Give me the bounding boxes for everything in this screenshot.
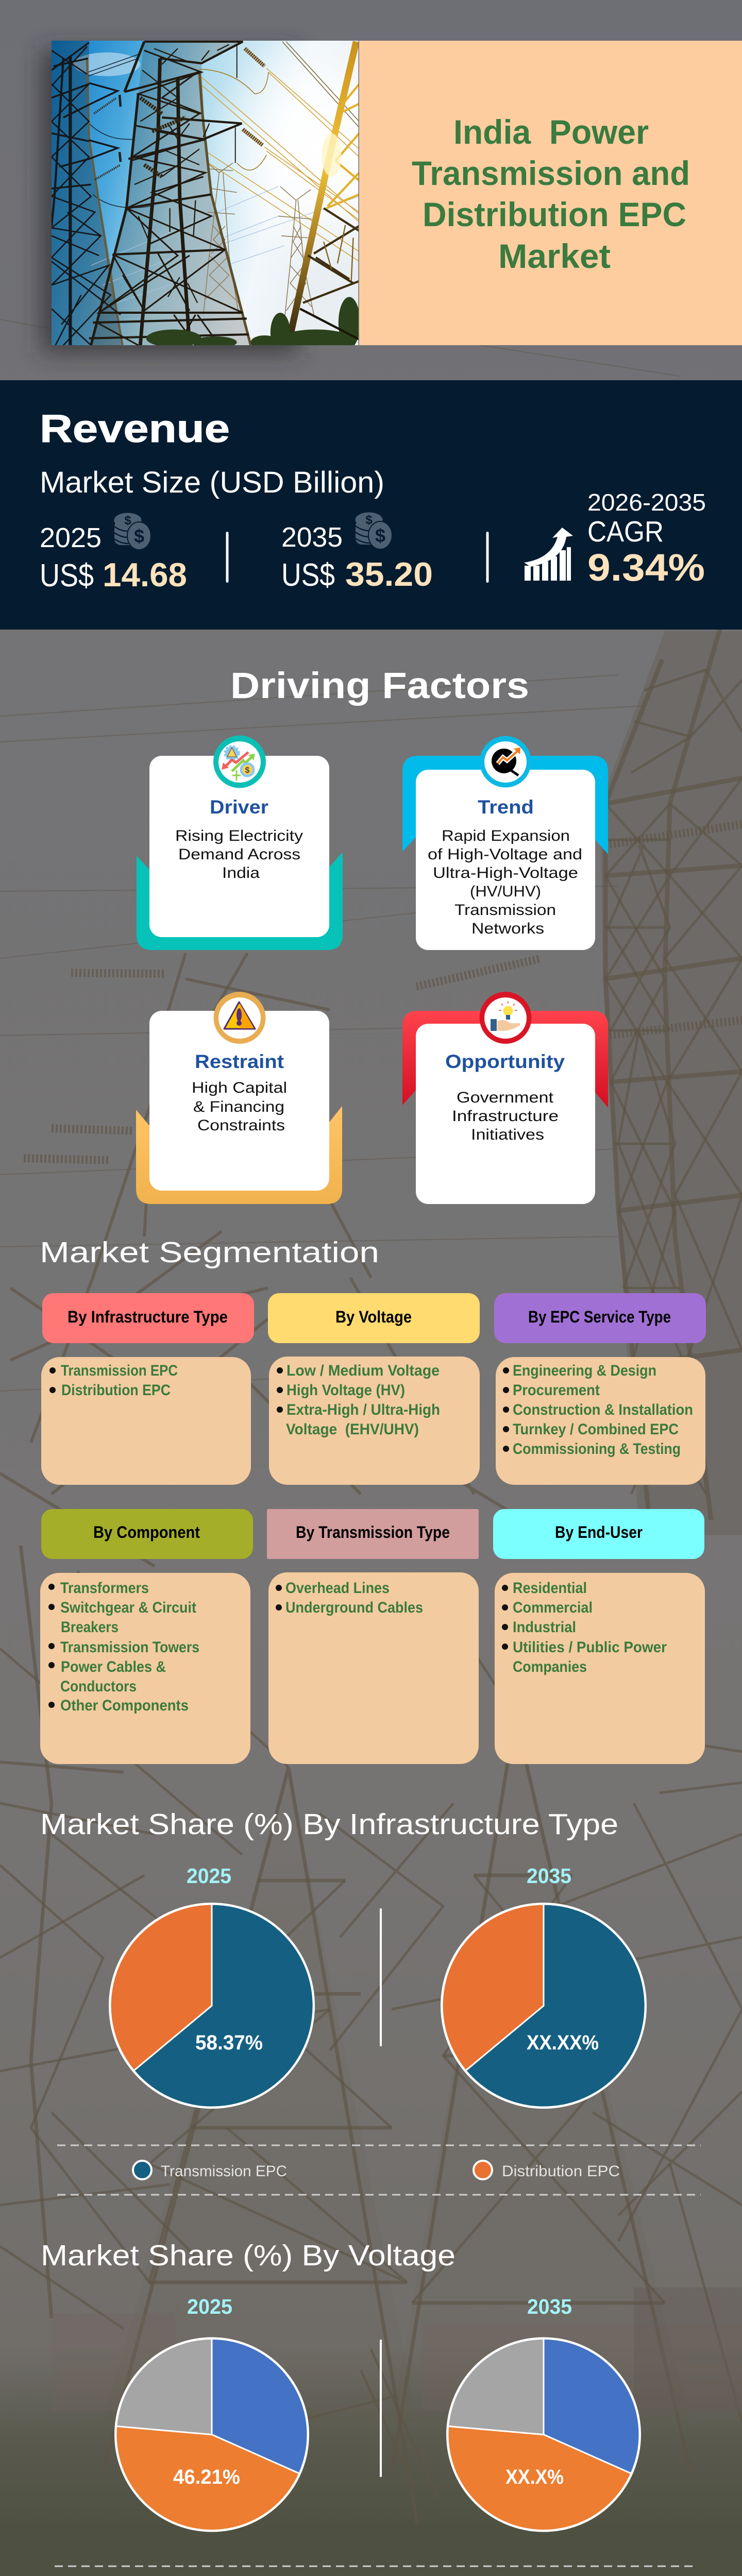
panel: by component [40, 1509, 253, 1764]
background: distant buildings and grass [52, 2287, 742, 2411]
2025 value: US$ [40, 558, 94, 594]
opportunity text: Initiatives [471, 1126, 544, 1143]
icon: driver: $ [245, 766, 250, 775]
driver text: India [222, 865, 260, 882]
list items [277, 1362, 440, 1438]
driver card [149, 756, 329, 937]
list items: Commissioning & Testing [513, 1440, 681, 1458]
header [268, 1293, 480, 1343]
opportunity text [452, 1089, 559, 1143]
header text: By Component [93, 1523, 200, 1541]
list items: Breakers [61, 1619, 119, 1636]
revenue background [0, 380, 742, 630]
pie 2035 [447, 2338, 640, 2531]
list items: Other Components [60, 1697, 189, 1714]
icon: coin stack 2025: $ [124, 514, 131, 528]
header text: By End-User [555, 1523, 643, 1541]
panel: by end-user [493, 1509, 705, 1764]
title: Distribution EPC [423, 195, 686, 233]
list items: Companies [513, 1658, 587, 1675]
list items: Switchgear & Circuit [60, 1599, 196, 1616]
trend text: Transmission [454, 902, 556, 919]
driver text [175, 827, 303, 882]
opportunity text: Government [457, 1089, 554, 1106]
trend text: of High-Voltage and [428, 846, 582, 863]
market size label: Market Size (USD Billion) [40, 466, 384, 499]
panel: driver [137, 736, 343, 950]
restraint card [149, 1011, 329, 1191]
list items [503, 1362, 693, 1458]
CAGR [587, 489, 706, 589]
list items: Engineering & Design [513, 1362, 656, 1379]
hero shadow [41, 49, 299, 353]
trend text: (HV/UHV) [470, 883, 541, 900]
panel: by EPC service type [494, 1293, 706, 1485]
hero panel [41, 41, 742, 353]
2035 value [281, 522, 433, 593]
panel: by voltage [268, 1293, 480, 1485]
CAGR: 9.34% [587, 546, 705, 589]
list body [269, 1357, 480, 1485]
label 2035: 2035 [527, 2295, 572, 2318]
tree line [146, 297, 359, 345]
header [267, 1509, 479, 1559]
list items: Overhead Lines [285, 1580, 390, 1597]
revenue panel [0, 380, 742, 630]
legend item: distribution EPC: Distribution EPC [502, 2163, 620, 2180]
header text: By EPC Service Type [528, 1308, 671, 1326]
restraint ribbon [136, 1106, 342, 1204]
2025 value: 2025 [40, 522, 102, 553]
panel: restraint [136, 992, 342, 1204]
title [412, 113, 690, 275]
heading: driving factors: Driving Factors [230, 666, 529, 706]
driver text: Demand Across [178, 846, 300, 863]
2025 value [40, 522, 187, 594]
heading: market share by voltage: Market Share (%) By Voltage [41, 2239, 456, 2272]
icon: coin stack 2035: $ [375, 525, 385, 546]
opportunity heading: Opportunity [445, 1051, 565, 1072]
list items: Turnkey / Combined EPC [513, 1421, 679, 1438]
panel: by transmission type [267, 1509, 479, 1764]
label 2025: 2025 [187, 1864, 231, 1888]
panel: trend [402, 736, 608, 950]
list items: Underground Cables [285, 1599, 423, 1616]
left tower [52, 43, 123, 345]
pie 2035: XX.X% [505, 2466, 564, 2488]
divider [226, 532, 229, 583]
trend heading: Trend [478, 796, 534, 818]
CAGR: CAGR [587, 515, 664, 548]
icon: coin stack 2025: $ [134, 526, 144, 547]
heading: market segmentation: Market Segmentation [40, 1236, 379, 1269]
panel: by infrastructure type [41, 1293, 254, 1485]
divider [486, 532, 488, 583]
opportunity ribbon [402, 1011, 608, 1108]
label 2025: 2025 [187, 2295, 232, 2318]
restraint text: Constraints [197, 1117, 285, 1134]
title: India Power [453, 113, 649, 151]
list items: Transformers [60, 1580, 149, 1597]
icon: coin stack 2035 [356, 513, 392, 549]
list items: High Voltage (HV) [286, 1382, 405, 1399]
list items: Industrial [513, 1619, 576, 1636]
restraint text: & Financing [193, 1098, 284, 1115]
list body [495, 1573, 705, 1764]
list items: Construction & Installation [513, 1401, 693, 1418]
wires [88, 42, 359, 305]
icon: restraint [213, 992, 266, 1044]
list items [49, 1362, 178, 1399]
list items: Utilities / Public Power [513, 1639, 667, 1656]
2035 value: US$ [281, 557, 335, 593]
list items: Distribution EPC [61, 1382, 171, 1399]
legend item: transmission EPC: Transmission EPC [161, 2163, 287, 2180]
list items: Power Cables & [61, 1658, 166, 1675]
icon: growth chart [524, 528, 573, 581]
2035 value: 35.20 [345, 555, 433, 593]
pie 2035 [441, 1903, 646, 2108]
2035 value: 2035 [281, 522, 343, 553]
icon: driver [213, 736, 266, 788]
list items: Voltage (EHV/UHV) [286, 1421, 419, 1438]
list items: Extra-High / Ultra-High [286, 1401, 440, 1418]
divider [380, 1908, 382, 2046]
list items [502, 1580, 667, 1675]
title: Market [498, 237, 611, 275]
list body [40, 1573, 250, 1764]
list items: Transmission EPC [61, 1362, 178, 1379]
pie 2025 [109, 1903, 314, 2108]
pie 2025: 46.21% [173, 2466, 240, 2488]
icon: coin stack 2035: $ [365, 513, 373, 527]
driver heading: Driver [210, 796, 268, 818]
list body [496, 1357, 705, 1485]
pie 2025: 58.37% [195, 2031, 263, 2054]
trend text [428, 827, 582, 937]
list body [41, 1357, 251, 1485]
restraint text: High Capital [192, 1079, 287, 1096]
list items [276, 1580, 423, 1616]
main tower [89, 42, 264, 345]
divider [380, 2340, 382, 2477]
list items: Transmission Towers [60, 1639, 199, 1656]
header text: By Transmission Type [296, 1523, 450, 1541]
list items: Residential [513, 1580, 587, 1597]
pie 2025 [115, 2338, 308, 2531]
2025 value: 14.68 [103, 556, 187, 594]
pie 2035: XX.XX% [527, 2031, 599, 2054]
opportunity text: Infrastructure [452, 1108, 559, 1125]
distant towers [204, 163, 314, 323]
header text: By Infrastructure Type [68, 1308, 228, 1326]
header [42, 1293, 254, 1343]
opportunity card [416, 1024, 595, 1204]
legend: voltage [55, 2566, 699, 2576]
tower shading [52, 41, 123, 345]
list items: Commercial [513, 1599, 593, 1616]
trend text: Networks [471, 920, 544, 937]
panel: opportunity [402, 992, 608, 1204]
list items: Procurement [513, 1382, 600, 1399]
restraint heading: Restraint [195, 1051, 284, 1072]
revenue heading: Revenue [40, 407, 230, 451]
header [494, 1293, 706, 1343]
legend item: distribution EPC [474, 2161, 620, 2180]
list items: Conductors [60, 1678, 137, 1695]
label 2035: 2035 [527, 1864, 571, 1888]
chart: voltage pies [115, 2295, 640, 2531]
header [493, 1509, 704, 1559]
driver text: Rising Electricity [175, 827, 303, 844]
restraint text [192, 1079, 287, 1134]
list items: Low / Medium Voltage [286, 1362, 440, 1379]
icon: coin stack 2025 [114, 513, 151, 550]
heading: market share by infrastructure type: Market Share (%) By Infrastructure Type [40, 1808, 618, 1841]
right golden tower [288, 42, 359, 345]
title background [359, 41, 742, 345]
list items [48, 1580, 199, 1714]
trend ribbon [402, 756, 608, 854]
header [41, 1509, 253, 1559]
trend text: Rapid Expansion [442, 827, 570, 844]
title: Transmission and [412, 154, 690, 192]
legend: infrastructure type [57, 2145, 701, 2195]
hero photo: power transmission towers [52, 41, 360, 352]
trend card [416, 770, 595, 950]
chart: infrastructure type pies [109, 1864, 646, 2108]
header text: By Voltage [335, 1308, 412, 1326]
icon: trend [480, 736, 531, 787]
list body [268, 1572, 479, 1764]
icon: opportunity [479, 992, 532, 1044]
driver ribbon [137, 852, 343, 950]
trend text: Ultra-High-Voltage [433, 865, 578, 882]
CAGR: 2026-2035 [587, 489, 706, 516]
